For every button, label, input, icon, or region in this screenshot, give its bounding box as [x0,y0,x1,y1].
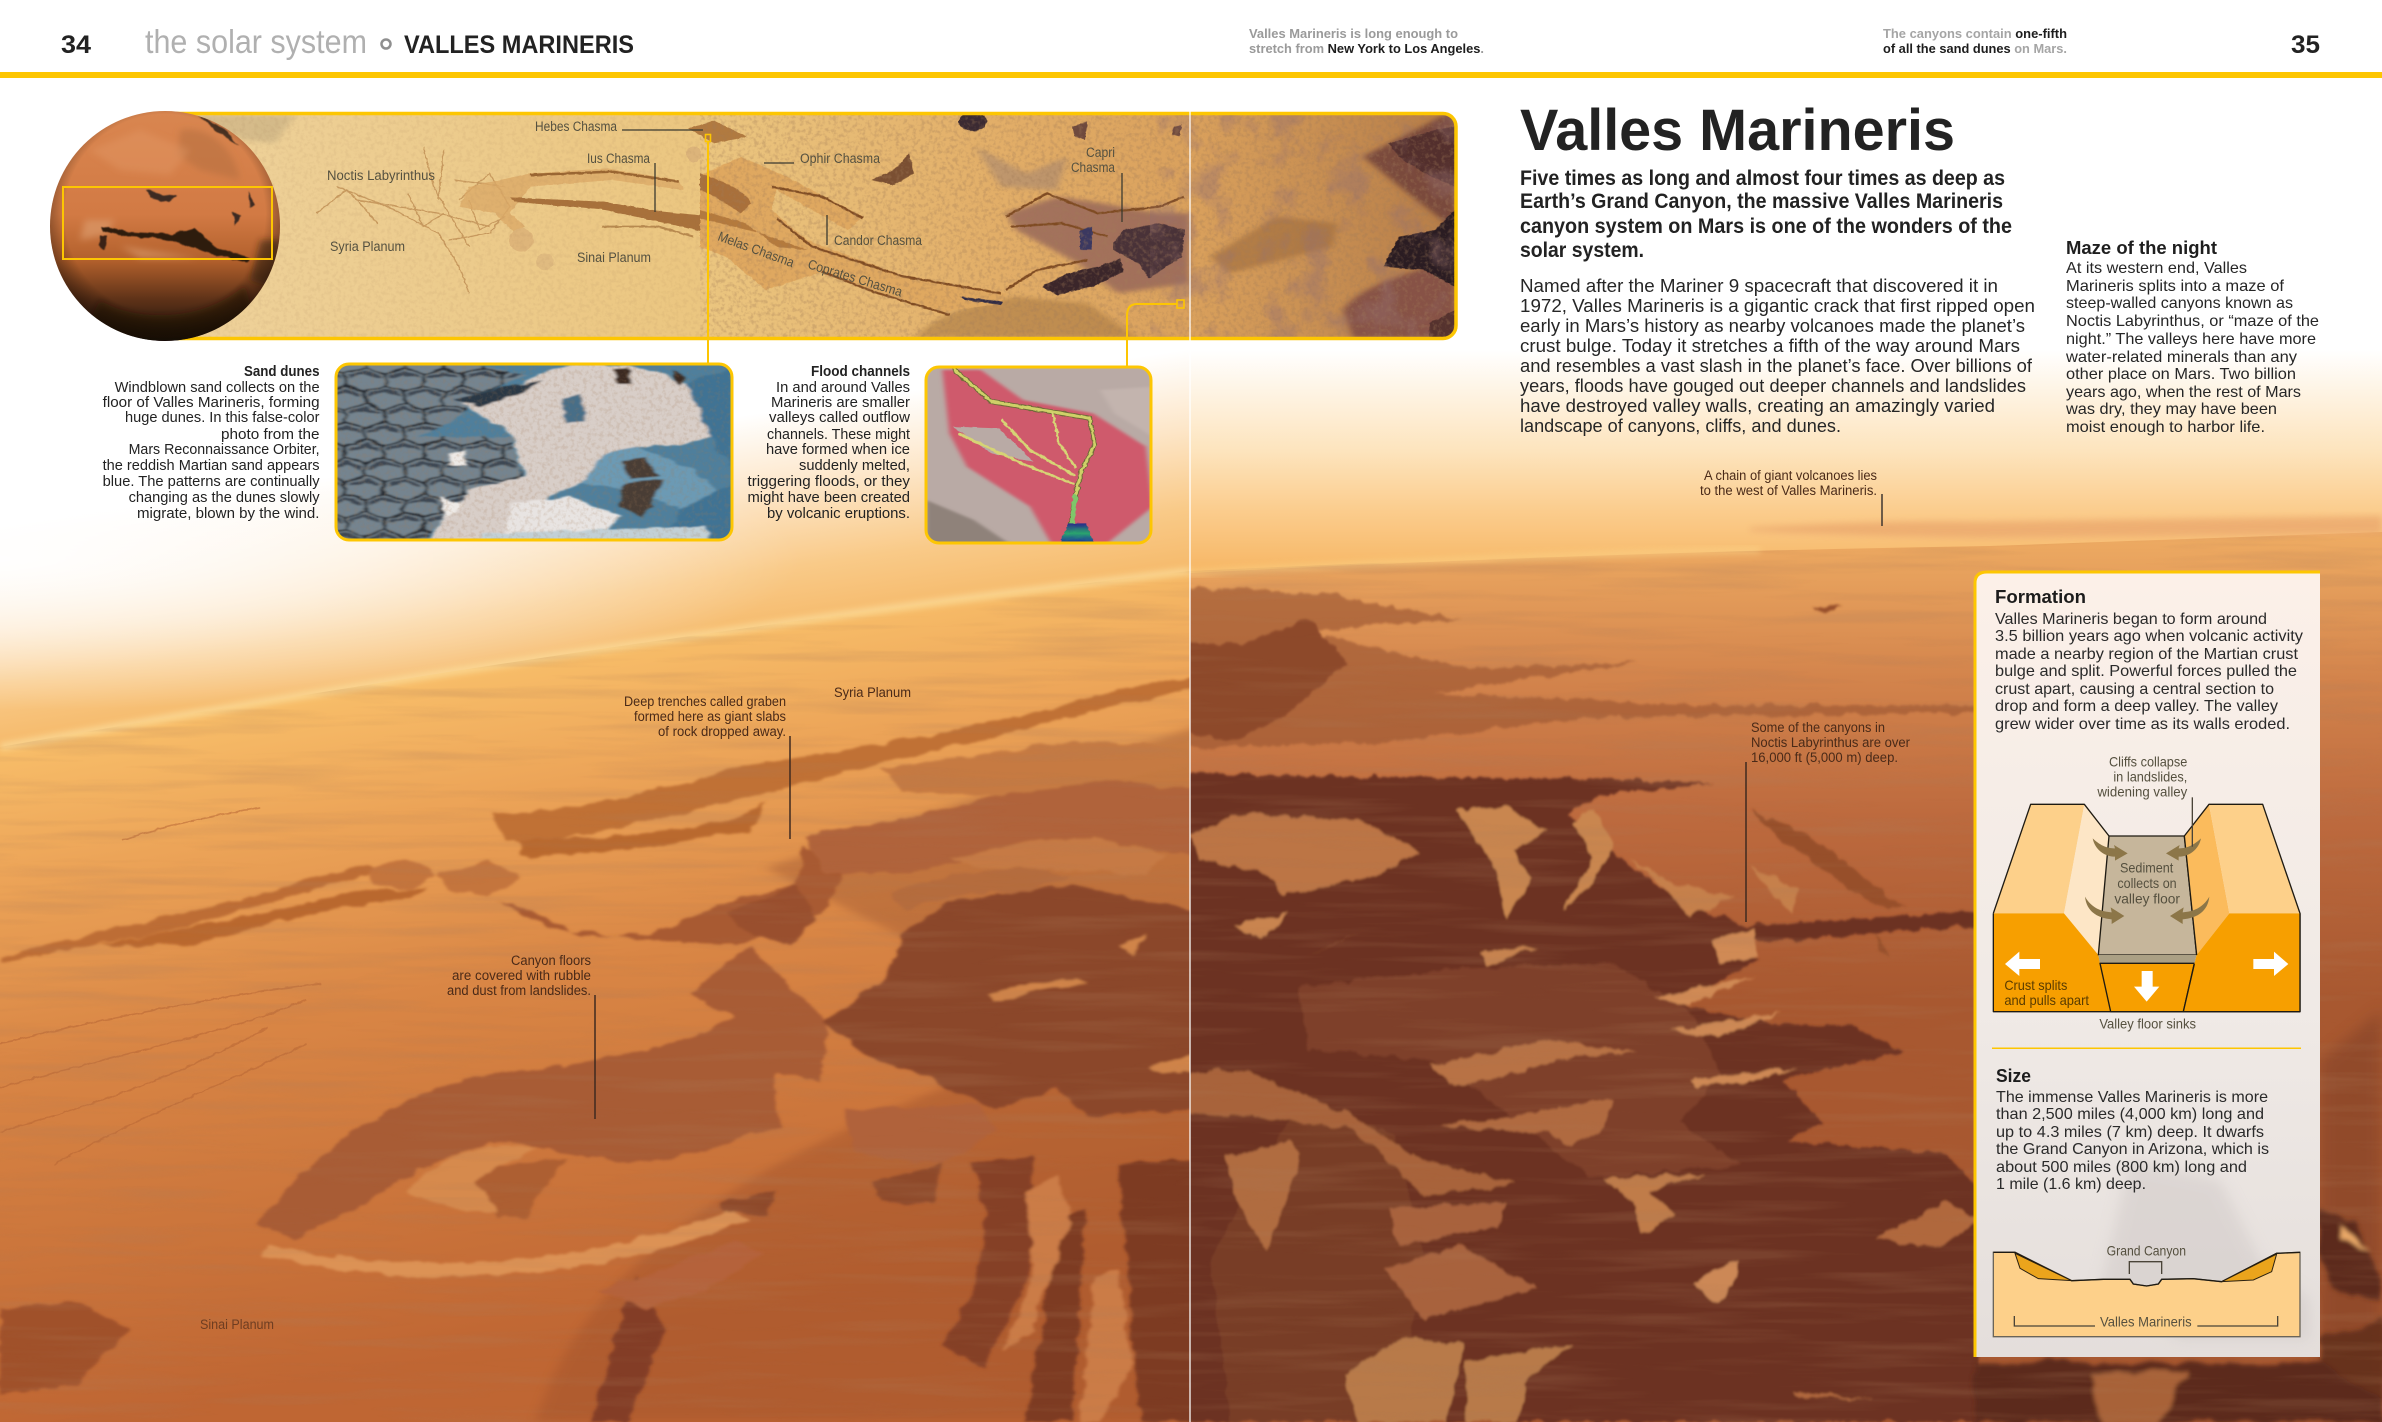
photo callout: chain of volcanoes: to the west of Valles Marineris. [1700,483,1877,498]
formation diagram [1993,754,2300,1031]
introduction: Five times as long and almost four times as deep as [1520,167,2005,190]
flood channels caption: Flood channels [811,364,910,380]
right crust block [2183,804,2300,1012]
diagram labels: Valley floor sinks [2099,1015,2196,1031]
locator box on globe [63,187,272,259]
sand dunes caption: floor of Valles Marineris, forming [103,395,320,411]
introduction [1520,167,2012,262]
map panel: Valles Marineris relief map [150,110,1456,339]
flood channels caption: Marineris are smaller [771,395,910,411]
introduction: Earth’s Grand Canyon, the massive Valles Marineris [1520,190,2003,213]
side text: Maze of the night: years ago, when the rest of Mars [2066,384,2301,401]
flood channels caption: triggering floods, or they [748,474,911,490]
main body text: crust bulge. Today it stretches a fifth of the way around Mars [1520,335,2020,356]
Grand Canyon label and bracket: Grand Canyon [2107,1243,2186,1259]
page number left: 34 [61,31,91,59]
main body text: Named after the Mariner 9 spacecraft that discovered it in [1520,275,1998,296]
Grand Canyon label and bracket [2107,1243,2186,1274]
centre fold line [1189,78,1191,1422]
sand dunes caption [103,364,320,522]
right half terrain [1180,586,1980,1422]
formation text: crust apart, causing a central section to [1995,681,2274,698]
left half terrain [0,674,1200,1422]
sediment arrows [2085,838,2209,924]
diagram labels [2004,754,2196,1031]
size text: than 2,500 miles (4,000 km) long and [1996,1106,2264,1123]
side text: Maze of the night: At its western end, Valles [2066,260,2247,277]
west map terrain [184,115,747,293]
header rule [0,72,2382,78]
locator lines from map to photos [706,134,1184,367]
map border [150,114,1456,338]
flood channels caption: might have been created [748,490,910,506]
size text: Size [1996,1066,2031,1086]
size text: about 500 miles (800 km) long and [1996,1159,2247,1176]
main body text: years, floods have gouged out deeper channels and landslides [1520,375,2026,396]
photo callout: canyon floors: Canyon floors [511,953,591,968]
formation text: made a nearby region of the Martian crust [1995,646,2299,663]
side text: Maze of the night: Maze of the night [2066,238,2217,258]
photo callout: graben: formed here as giant slabs [634,709,786,724]
sand dunes caption: migrate, blown by the wind. [137,506,320,522]
valley floor [2098,836,2197,1012]
diagram labels: Crust splits [2004,977,2067,993]
map labels: Coprates Chasma [806,257,905,300]
east map terrain [700,110,1455,338]
fact: sand dunes: of all the sand dunes on Mars. [1883,41,2067,56]
movement arrows [2005,952,2288,1002]
page number right: 35 [2291,31,2320,59]
formation text [1995,587,2303,733]
canyon slopes [2015,1253,2277,1282]
photo label: Sinai Planum: Sinai Planum [200,1317,274,1332]
map labels: Ophir Chasma [800,151,880,166]
photo callout: deep canyons: Some of the canyons in [1751,720,1885,735]
photo callout: graben [624,694,790,839]
sand dunes caption: huge dunes. In this false-color [125,410,320,426]
flood channels caption: In and around Valles [776,380,910,396]
flood channels caption: valleys called outflow [769,410,911,426]
photo: flood channels [925,367,1153,543]
page topic: VALLES MARINERIS [404,31,634,59]
sand dunes caption: the reddish Martian sand appears [103,458,320,474]
main body text: and resembles a vast slash in the planet’s face. Over billions of [1520,355,2033,376]
fact: New York to Los Angeles: stretch from New York to Los Angeles. [1249,41,1484,56]
sand dunes caption: Mars Reconnaissance Orbiter, [129,442,320,458]
map labels: Candor Chasma [834,233,922,248]
formation text: Formation [1995,587,2086,607]
main body text [1520,275,2035,436]
map labels: Sinai Planum [577,250,651,265]
side text: Maze of the night: steep-walled canyons known as [2066,295,2293,312]
size text: up to 4.3 miles (7 km) deep. It dwarfs [1996,1124,2264,1141]
map labels: Capri [1086,145,1115,160]
formation text: Valles Marineris began to form around [1995,611,2267,628]
size text [1996,1066,2269,1193]
panel divider [1992,1048,2301,1049]
photo callout: deep canyons [1746,720,1910,922]
left crust block [1993,804,2300,1012]
side text: Maze of the night: Noctis Labyrinthus, or “maze of the [2066,313,2319,330]
map texture [150,113,1456,339]
section title: the solar system [145,23,367,60]
diagram labels: Cliffs collapse [2109,754,2188,770]
photo callout: deep canyons: 16,000 ft (5,000 m) deep. [1751,750,1898,765]
horizontal ground texture [0,530,2382,1422]
introduction: canyon system on Mars is one of the wonders of the [1520,215,2012,238]
flood channels caption: channels. These might [767,427,910,443]
fact: sand dunes [1883,26,2067,56]
photo callout: canyon floors: are covered with rubble [452,968,591,983]
map labels: Noctis Labyrinthus [327,168,435,183]
side text: Maze of the night [2065,238,2319,436]
formation text: drop and form a deep valley. The valley [1995,698,2278,715]
flood channels caption [748,364,911,522]
sand dunes caption: changing as the dunes slowly [129,490,320,506]
photo label: Syria Planum: Syria Planum [834,685,911,700]
sand dunes caption: Windblown sand collects on the [115,380,320,396]
side text: Maze of the night: night.” The valleys here have more [2066,331,2316,348]
photo callout: canyon floors [447,953,595,1119]
side text: Maze of the night: moist enough to harbor life. [2066,419,2265,436]
fact: New York to Los Angeles [1249,26,1484,56]
photo callout: graben: Deep trenches called graben [624,694,786,709]
size text: The immense Valles Marineris is more [1996,1089,2268,1106]
diagram labels: Sediment [2120,860,2173,876]
photo: sand dunes [329,360,742,543]
photo callout: canyon floors: and dust from landslides. [447,983,591,998]
main body text: early in Mars’s history as nearby volcanoes made the planet’s [1520,315,2025,336]
photo callout: deep canyons: Noctis Labyrinthus are over [1751,735,1910,750]
map labels [327,119,1122,300]
side text: Maze of the night: Marineris splits into a maze of [2066,278,2285,295]
main title: Valles Marineris [1520,98,1955,163]
map labels: Syria Planum [330,239,405,254]
Valles Marineris label and bracket [2014,1314,2278,1330]
photo callout: chain of volcanoes [1700,468,1882,526]
sand dunes caption: blue. The patterns are continually [103,474,320,490]
globe of Mars [50,111,280,341]
flood channels caption: suddenly melted, [799,458,910,474]
far right strip terrain [1976,1010,2382,1422]
header [0,23,2382,78]
panel: formation and size [1975,572,2320,1357]
photo callout: graben: of rock dropped away. [658,724,786,739]
flood channels caption: by volcanic eruptions. [767,506,910,522]
map labels: Melas Chasma [716,229,797,270]
introduction: solar system. [1520,239,1644,262]
diagram labels: and pulls apart [2004,992,2089,1008]
sand dunes caption: photo from the [221,427,320,443]
sand dunes caption: Sand dunes [244,364,320,380]
Valles Marineris label and bracket: Valles Marineris [2100,1314,2192,1330]
diagram labels: in landslides, [2113,769,2187,785]
size text: 1 mile (1.6 km) deep. [1996,1176,2146,1193]
diagram labels: valley floor [2114,890,2180,906]
main body text: have destroyed valley walls, creating an amazingly varied [1520,395,1995,416]
formation text: grew wider over time as its walls eroded. [1995,716,2290,733]
map labels: Chasma [1071,160,1115,175]
map labels: Hebes Chasma [535,119,617,134]
side text: Maze of the night: was dry, they may have been [2065,401,2277,418]
fact: New York to Los Angeles: Valles Marineris is long enough to [1249,26,1458,41]
size comparison diagram [1993,1243,2300,1337]
main body text: landscape of canyons, cliffs, and dunes. [1520,415,1841,436]
fact: sand dunes: The canyons contain one-fifth [1883,26,2067,41]
diagram labels: widening valley [2096,784,2187,800]
page background and Mars landscape photo [0,361,2382,1422]
size text: the Grand Canyon in Arizona, which is [1996,1141,2269,1158]
map labels: Ius Chasma [587,151,650,166]
formation text: bulge and split. Powerful forces pulled the [1995,663,2297,680]
diagram labels: collects on [2117,875,2177,891]
side text: Maze of the night: water-related minerals than any [2065,349,2297,366]
main body text: 1972, Valles Marineris is a gigantic crack that first ripped open [1520,295,2035,316]
formation text: 3.5 billion years ago when volcanic activity [1995,628,2303,645]
photo callout: chain of volcanoes: A chain of giant volcanoes lies [1704,468,1877,483]
flood channels caption: have formed when ice [766,442,910,458]
side text: Maze of the night: other place on Mars. Two billion [2066,366,2296,383]
